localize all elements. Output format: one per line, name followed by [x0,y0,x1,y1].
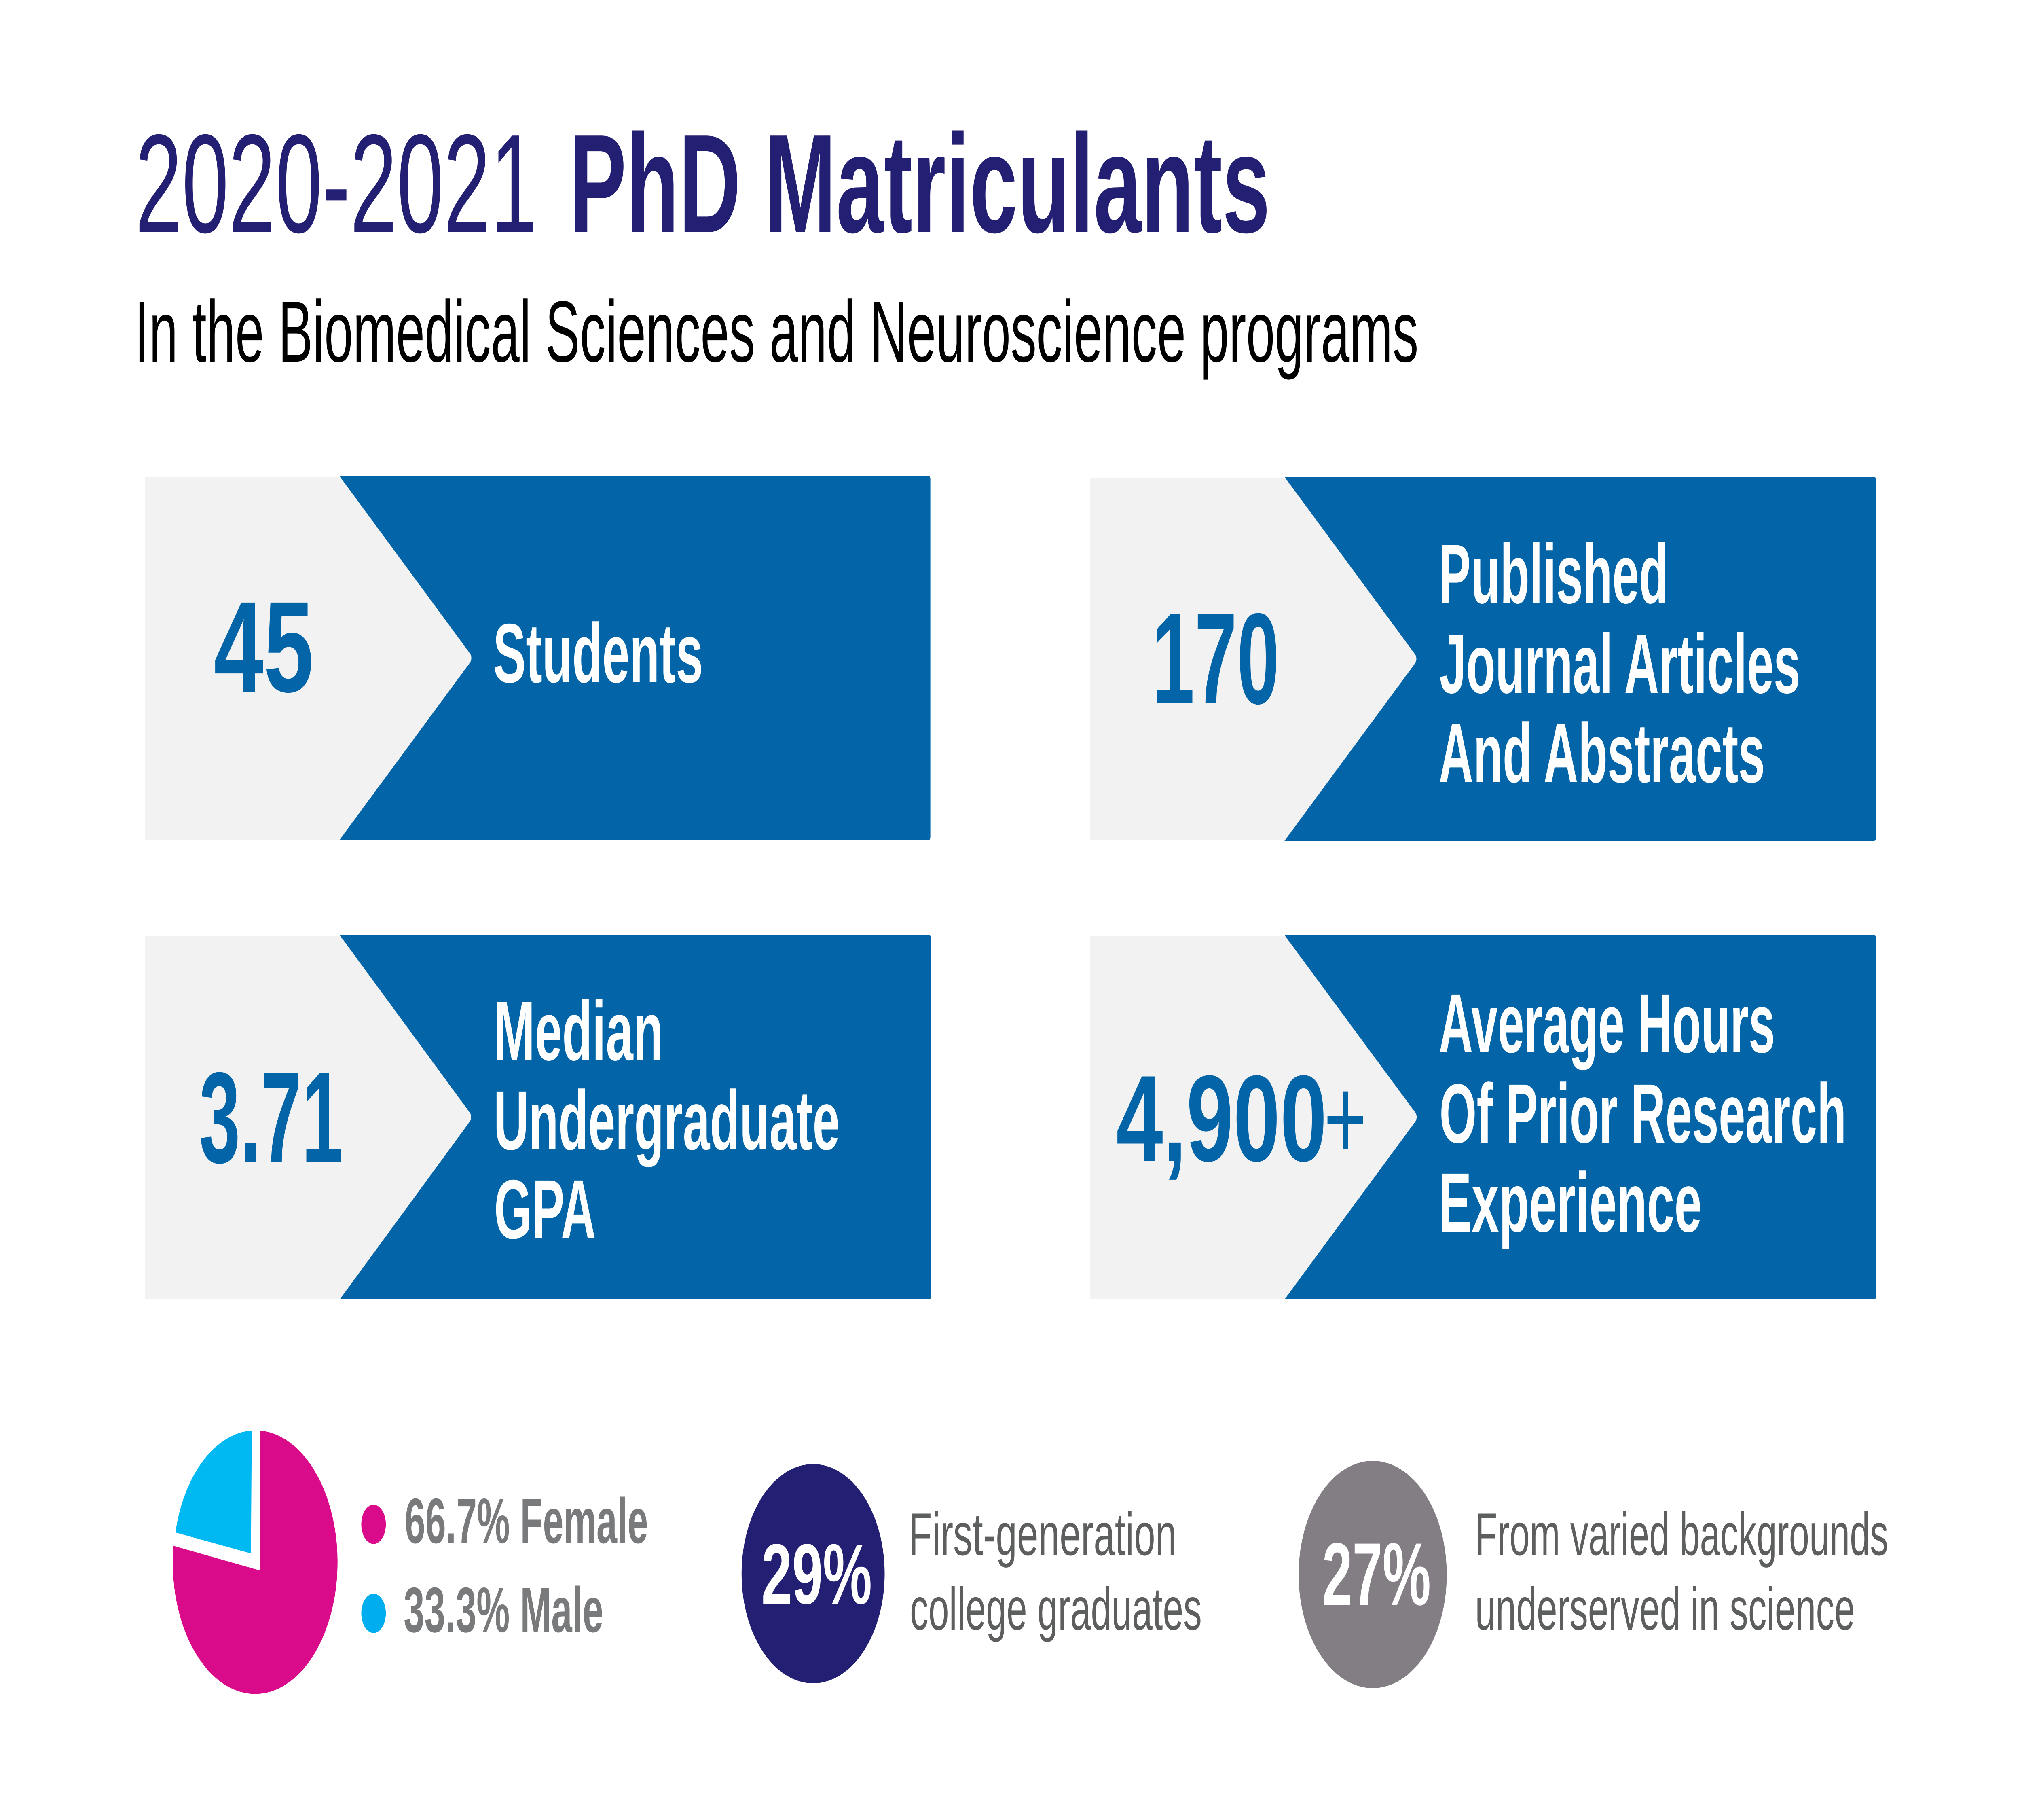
panel: students [145,476,931,840]
title: 2020-2021 [135,106,537,262]
label: research hours: Experience [1439,1155,1702,1249]
panel: publications [1090,477,1876,841]
stat: first-generation: college graduates [910,1576,1202,1642]
label: publications: Published [1439,527,1669,621]
stat: first-generation [742,1464,1202,1683]
title: PhD Matriculants [569,106,1270,262]
stat: first-generation: 29% [761,1526,872,1622]
legend: gender [361,1485,648,1646]
stat: first-generation: First-generation [909,1501,1176,1568]
label: GPA: Undergraduate [494,1073,840,1167]
legend item: female: 66.7% Female [405,1485,648,1557]
label: GPA [494,984,840,1256]
label: publications [1439,527,1800,800]
label: research hours: Average Hours [1439,976,1775,1070]
label: GPA: Median [494,984,663,1078]
panel: GPA [145,935,931,1299]
stat: varied backgrounds: 27% [1322,1524,1431,1624]
pie chart: gender [173,1431,338,1694]
label: publications: And Abstracts [1439,706,1765,800]
label: research hours: Of Prior Research [1439,1067,1846,1160]
stat: 170: 170 [1152,586,1280,731]
label: students: Students [493,606,703,700]
panel: research hours [1090,935,1876,1299]
title [135,106,1270,262]
stat: varied backgrounds: underserved in science [1475,1576,1855,1642]
stat: 4,900+: 4,900 [1116,1050,1327,1187]
legend item: male: 33.3% Male [404,1574,603,1646]
label: GPA: GPA [494,1162,596,1256]
stat: 45: 45 [214,574,314,719]
label: research hours [1439,976,1846,1249]
stat: varied backgrounds [1299,1461,1888,1688]
label: publications: Journal Articles [1439,617,1800,711]
subtitle: In the Biomedical Sciences and Neuroscience programs [135,283,1419,380]
stat: 4,900+: + [1324,1054,1367,1184]
stat: 3.71: 3.71 [199,1045,343,1190]
stat: varied backgrounds: From varied backgrounds [1475,1501,1888,1568]
